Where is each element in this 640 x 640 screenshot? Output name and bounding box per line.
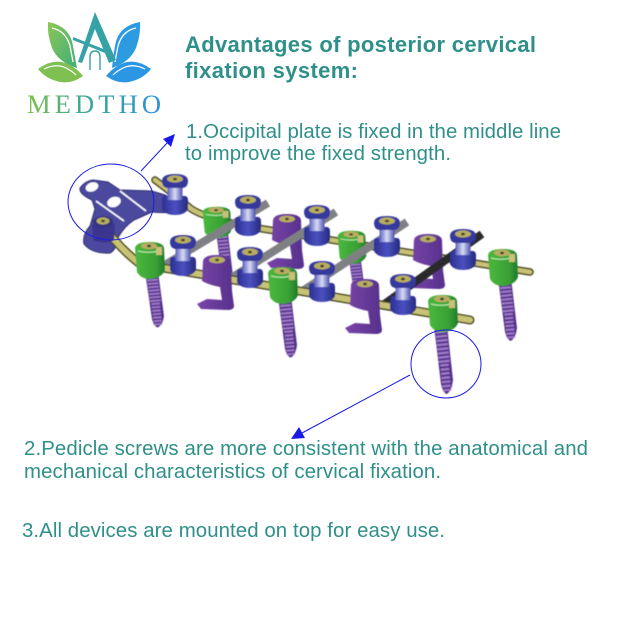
icon: left lower green leaf [38,62,83,82]
spinal fixation system illustration [80,174,530,394]
plate-mounted connector [92,216,115,242]
back rod [155,180,530,272]
back row connectors [162,174,476,270]
title: fixation system: [185,58,358,83]
icon: right lower blue leaf [106,62,151,82]
arrow: to point 1 [141,134,175,171]
icon: right upper blue leaf [112,22,140,68]
icon: letter A monogram [73,12,116,63]
occipital plate [80,180,182,253]
back row hooks and green heads [203,207,518,289]
text block: point 1 [185,121,561,165]
text block: point 1: to improve the fixed strength. [185,143,451,165]
front rod [108,232,470,320]
icon: left upper green leaf [48,22,77,68]
arrow: to point 2 [291,375,410,439]
front row screws [146,275,453,394]
black cross bar [383,234,482,305]
logo wordmark: MEDTHO [27,89,161,119]
text block: point 2: 2.Pedicle screws are more consistent with the anatomical and [24,438,588,460]
title: Advantages of posterior cervical [185,32,536,57]
callout circle: pedicle screw [411,330,481,398]
text block: point 3: 3.All devices are mounted on top for easy use. [22,520,445,542]
icon: small arch monogram [90,51,100,70]
logo: MEDTHO lotus [27,12,161,119]
front connectors [135,235,458,332]
text block: point 1: 1.Occipital plate is fixed in the middle line [186,121,561,143]
callout circle: occipital plate [68,164,154,240]
text block: point 2 [24,438,588,483]
title [185,32,536,83]
gray cross bars [163,203,407,290]
text block: point 2: mechanical characteristics of cervical fixation. [24,461,441,483]
front row hooks [197,255,382,334]
back row screws [216,232,517,341]
